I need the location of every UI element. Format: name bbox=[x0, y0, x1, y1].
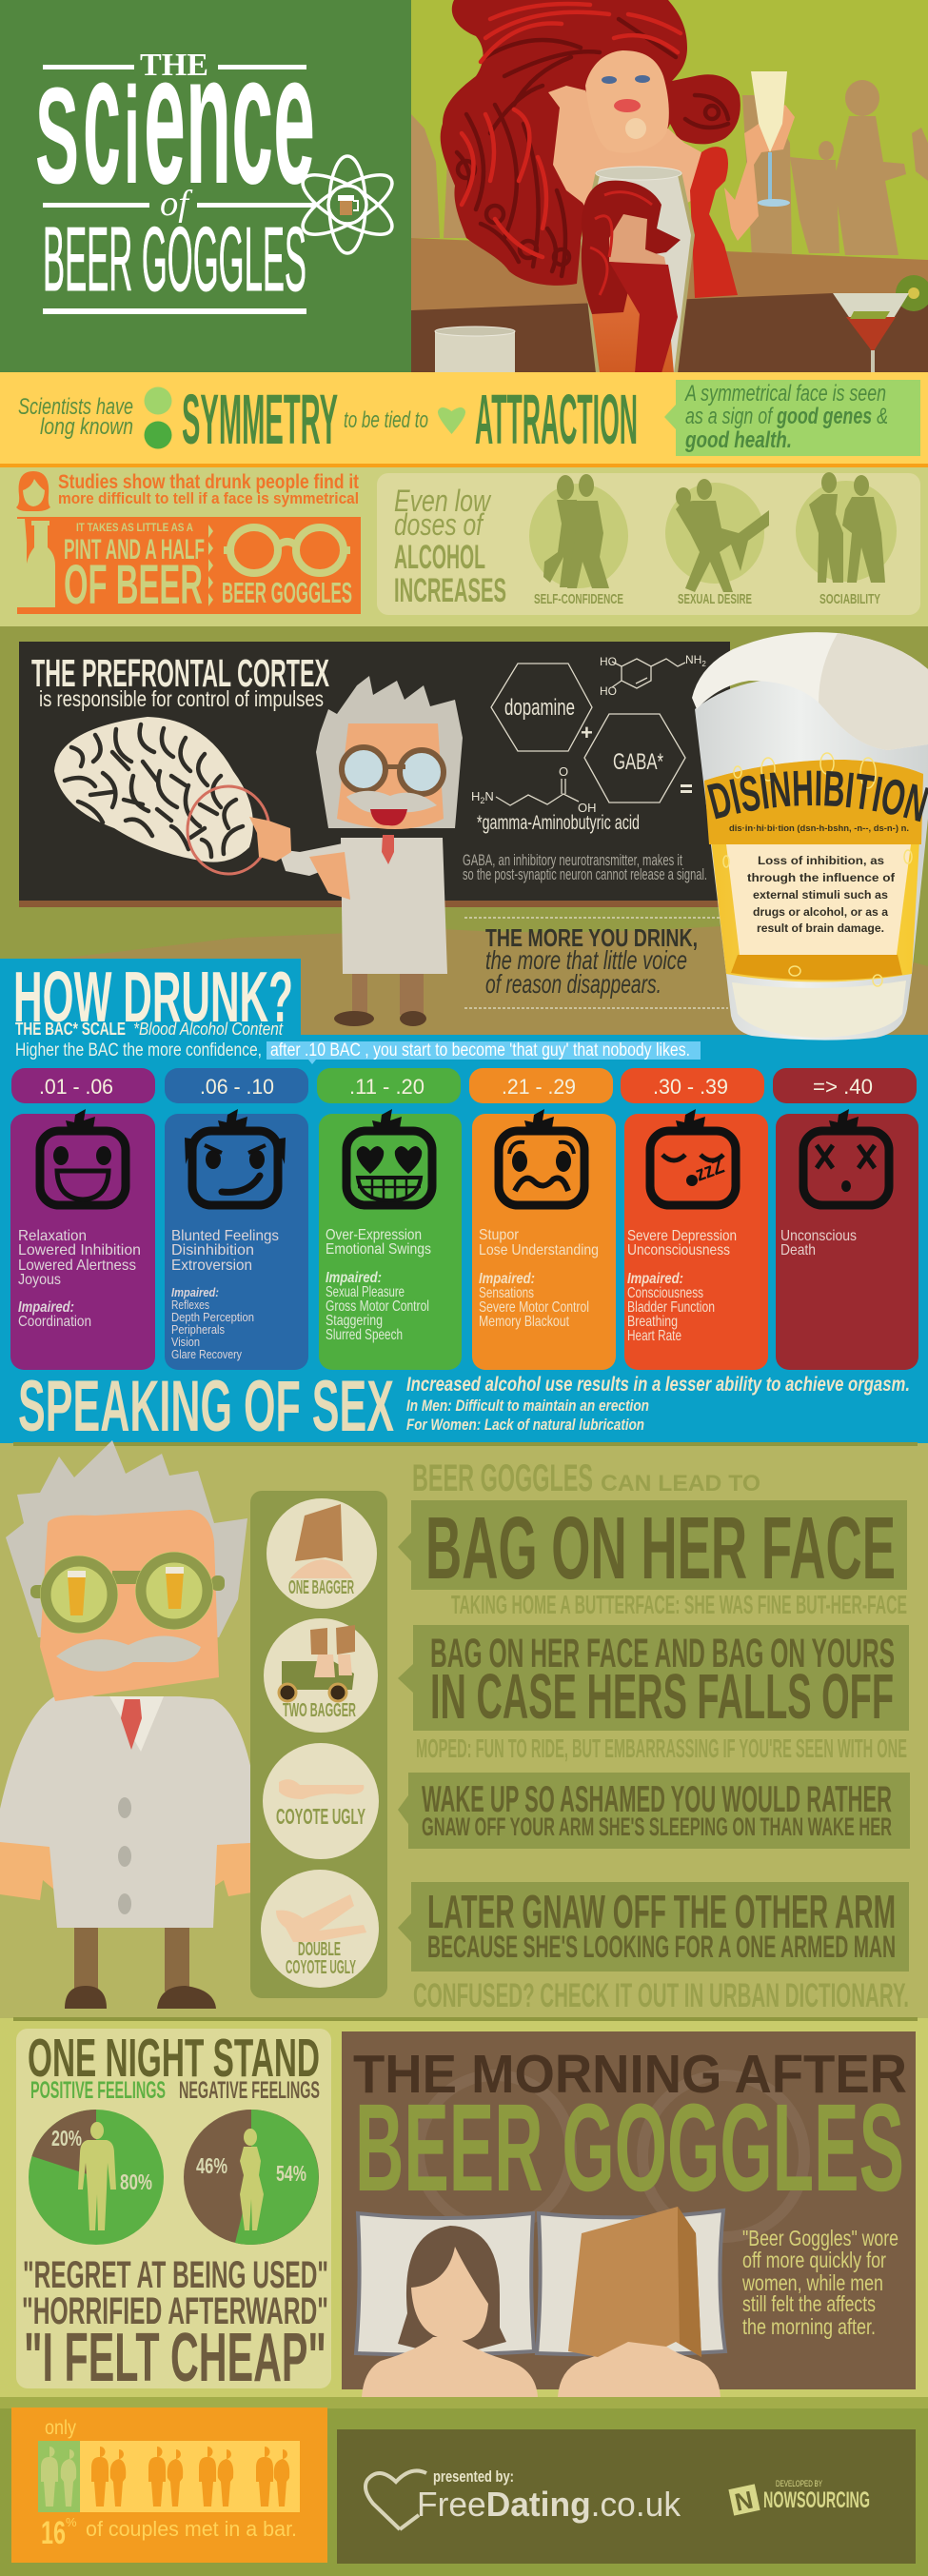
goggles with beer bbox=[30, 1552, 225, 1634]
icon: two bagger moped bbox=[264, 1618, 378, 1733]
quotes: "REGRET AT BEING USED" bbox=[23, 2254, 328, 2296]
text: responsible: is responsible for control of impulses bbox=[39, 686, 324, 711]
labels: chemistry: O bbox=[559, 764, 568, 779]
text: scientists have long known: Scientists have bbox=[18, 394, 133, 420]
labels: effects: SELF-CONFIDENCE bbox=[534, 591, 623, 607]
pillows bbox=[356, 2210, 725, 2355]
card: .01-.06 bbox=[10, 1109, 155, 1370]
labels: chemistry: GABA* bbox=[613, 749, 663, 775]
text: the more you drink: the more that little voice bbox=[485, 945, 687, 975]
icon: happy face bbox=[40, 1109, 126, 1205]
text: symptoms: Bladder Function bbox=[627, 1299, 715, 1316]
martini glass bbox=[833, 275, 928, 373]
text: symptoms bbox=[171, 1228, 279, 1361]
icon: one bagger bbox=[267, 1498, 377, 1609]
title text: of bbox=[160, 184, 193, 224]
icon: female head bbox=[16, 471, 50, 511]
text: symptoms: Heart Rate bbox=[627, 1328, 681, 1344]
text: studies show: more difficult to tell if a face is symmetrical bbox=[58, 489, 359, 507]
labels: chemistry: HO bbox=[600, 655, 617, 668]
head bbox=[40, 1510, 219, 1701]
labels: chemistry: dopamine bbox=[504, 695, 575, 721]
labels: chemistry: 2 bbox=[701, 660, 706, 668]
icon: dead face bbox=[803, 1109, 889, 1205]
BAC range pills: .01 - .06 bbox=[39, 1075, 113, 1099]
text: pronunciation: dis·in·hi·bi·tion (dsn-h-bshn, -n--, ds-n-) n. bbox=[729, 823, 909, 833]
text: symptoms: Stupor bbox=[479, 1227, 520, 1243]
quotes: "HORRIFIED AFTERWARD" bbox=[22, 2290, 328, 2332]
text: the more you drink: THE MORE YOU DRINK, bbox=[485, 923, 698, 952]
text: speaking of sex bbox=[406, 1374, 910, 1434]
text: definition: Loss of inhibition, as bbox=[758, 854, 884, 867]
text: definition bbox=[747, 854, 896, 935]
beer foam bbox=[692, 632, 928, 750]
callout: wake up ashamed bbox=[398, 1773, 910, 1849]
text: symptoms: Gross Motor Control bbox=[326, 1298, 429, 1315]
chalkboard bbox=[19, 642, 730, 907]
text: speaking of sex: For Women: Lack of natural lubrication bbox=[406, 1416, 644, 1434]
woman in bed bbox=[362, 2226, 538, 2397]
icon: sociability couple bbox=[796, 472, 897, 583]
mound bbox=[59, 923, 928, 1036]
professor: pointing bbox=[249, 676, 463, 1026]
text: symptoms: Impaired: bbox=[326, 1270, 382, 1286]
labels: chemistry: 2 bbox=[480, 796, 484, 805]
beer glass with beautiful woman bbox=[581, 167, 695, 373]
woman: face bbox=[585, 50, 669, 153]
text: symptoms: Staggering bbox=[326, 1313, 383, 1329]
labels: effects: SOCIABILITY bbox=[819, 591, 880, 607]
text: symptoms bbox=[627, 1228, 737, 1344]
text: the more you drink bbox=[485, 923, 698, 999]
text: symptoms: Memory Blackout bbox=[479, 1314, 569, 1330]
icon: symmetric dots bbox=[145, 386, 171, 449]
man with paper bag bbox=[558, 2207, 721, 2397]
pie chart: positive 80 percent: 80% bbox=[120, 2170, 152, 2194]
icon: sexual desire couple bbox=[665, 479, 769, 592]
heading: the prefrontal cortex: THE PREFRONTAL CORTEX bbox=[31, 651, 329, 695]
callout: bag on yours bbox=[398, 1625, 909, 1733]
logo: nowsourcing: DEVELOPED BY bbox=[776, 2479, 822, 2488]
BAC range pills: => .40 bbox=[813, 1075, 873, 1099]
panel: alcohol increases bbox=[377, 472, 920, 615]
text: symptoms: Lowered Alertness bbox=[18, 1258, 136, 1274]
icon: heart bbox=[438, 407, 465, 434]
panel: studies and doses bbox=[0, 467, 928, 626]
icon: atom with beer mug bbox=[295, 156, 400, 253]
icon: heart logo bbox=[365, 2470, 426, 2529]
text: symptoms bbox=[326, 1227, 431, 1343]
labels: chemistry bbox=[471, 653, 706, 834]
text: beer goggles wore off: women, while men bbox=[741, 2270, 883, 2295]
text: symptoms: Extroversion bbox=[171, 1258, 252, 1274]
head bbox=[337, 723, 444, 829]
legs bbox=[334, 971, 426, 1026]
panel: alcohol increases: INCREASES bbox=[394, 572, 506, 609]
text: symptoms: Consciousness bbox=[627, 1285, 703, 1301]
card: =>.40 bbox=[776, 1109, 918, 1370]
callout: other arm bbox=[398, 1882, 909, 1972]
BAC range pills: .30 - .39 bbox=[653, 1075, 728, 1099]
text: the more you drink: of reason disappears. bbox=[485, 969, 661, 999]
glasses bbox=[342, 747, 444, 794]
text: symptoms: Blunted Feelings bbox=[171, 1228, 279, 1244]
legs and shoes bbox=[65, 1923, 216, 2009]
woman: hair bbox=[441, 0, 740, 286]
icon: sleeping face: zzZ bbox=[692, 1154, 727, 1186]
panel: pint and a half: OF BEER bbox=[64, 554, 203, 616]
panel: one night stand bbox=[16, 2028, 331, 2396]
text: symptoms: Breathing bbox=[627, 1314, 678, 1330]
heading: beer goggles can lead to: CAN LEAD TO bbox=[601, 1471, 760, 1496]
diagram: dopamine and gaba hexagons bbox=[491, 659, 685, 805]
panel: prefrontal cortex bbox=[0, 626, 928, 1036]
illustration: bar scene bbox=[411, 0, 928, 373]
hands bbox=[0, 1836, 269, 1900]
text: definition: external stimuli such as bbox=[753, 888, 888, 902]
pie chart: negative 54 percent: 46% bbox=[196, 2153, 227, 2178]
panel: title: ence bbox=[144, 14, 315, 223]
icons: couples bbox=[41, 2447, 289, 2507]
icon: double coyote ugly arms: DOUBLE bbox=[298, 1939, 341, 1960]
champagne flute bbox=[751, 71, 790, 207]
lab coat bbox=[0, 1694, 265, 1928]
icon: heart eyes face bbox=[346, 1109, 432, 1205]
panel: footer bbox=[0, 2397, 928, 2576]
text: symptoms: Impaired: bbox=[479, 1271, 535, 1287]
icon: smirking face bbox=[185, 1109, 286, 1205]
beer glass: disinhibition bbox=[692, 632, 928, 1040]
BAC range pills: .06 - .10 bbox=[200, 1075, 274, 1099]
labels: chemistry: *gamma-Aminobutyric acid bbox=[477, 812, 640, 834]
text: symptoms: Depth Perception bbox=[171, 1310, 254, 1324]
card: .21-.29 bbox=[472, 1109, 616, 1370]
panel: symmetry: SYMMETRY bbox=[182, 380, 338, 459]
icon: brain bbox=[54, 717, 253, 862]
text: symptoms: Sexual Pleasure bbox=[326, 1284, 405, 1300]
panel: symmetry: ATTRACTION bbox=[475, 380, 638, 459]
panel: beer goggles can lead to bbox=[0, 1440, 928, 2018]
title text: THE bbox=[140, 48, 208, 83]
text: symptoms: Coordination bbox=[18, 1314, 91, 1330]
panel: alcohol increases: doses of bbox=[394, 507, 484, 542]
labels: chemistry: + bbox=[581, 721, 593, 744]
bar counter bbox=[411, 238, 928, 314]
panel: pint and a half: IT TAKES AS LITTLE AS A bbox=[76, 521, 193, 534]
moustache bbox=[56, 1635, 201, 1672]
heading: disinhibition bbox=[714, 805, 928, 824]
text: presented by: presented by: bbox=[433, 2467, 514, 2486]
coat bbox=[341, 838, 447, 974]
text: gaba description: so the post-synaptic neuron cannot release a signal. bbox=[463, 865, 707, 883]
text: beer goggles wore off: the morning after. bbox=[742, 2314, 876, 2339]
panel: title: BEER GOGGLES bbox=[43, 208, 306, 310]
labels: effects bbox=[534, 591, 880, 607]
heading: beer goggles can lead to: BEER GOGGLES bbox=[412, 1457, 593, 1499]
panel: symmetry bbox=[0, 372, 928, 467]
heading: how drunk: HOW DRUNK? bbox=[13, 957, 293, 1037]
logo: freedating: FreeDating.co.uk bbox=[417, 2485, 681, 2524]
panel: couples met in a bar bbox=[11, 2408, 327, 2563]
stat: 16 percent: % bbox=[66, 2515, 77, 2529]
background silhouettes bbox=[411, 80, 928, 257]
logo: nowsourcing: N bbox=[732, 2485, 756, 2517]
professor with beer goggles bbox=[0, 1440, 269, 2009]
moustache and mouth bbox=[346, 791, 437, 813]
icon: double coyote ugly arms bbox=[261, 1870, 379, 1988]
icon: coyote ugly arm bbox=[263, 1743, 379, 1859]
text: symptoms: Disinhibition bbox=[171, 1242, 254, 1258]
panel: alcohol increases: Even low bbox=[394, 484, 491, 518]
text: symptoms: Impaired: bbox=[18, 1299, 74, 1316]
card: .30-.39 bbox=[624, 1109, 768, 1370]
text: gaba description bbox=[463, 851, 707, 883]
rocks glass bbox=[435, 327, 515, 373]
text: bac scale bbox=[15, 1020, 284, 1039]
text: symptoms: Lose Understanding bbox=[479, 1242, 599, 1258]
tie bbox=[121, 1699, 142, 1750]
BAC range pills: .11 - .20 bbox=[349, 1075, 425, 1099]
text: symptoms: Unconsciousness bbox=[627, 1242, 730, 1258]
panel: credits bbox=[337, 2429, 916, 2564]
text: beer goggles wore off: still felt the affects bbox=[742, 2291, 876, 2316]
pie chart: negative 54 percent: 54% bbox=[276, 2161, 306, 2186]
text: beer goggles wore off: off more quickly for bbox=[742, 2248, 886, 2272]
text: symptoms: Severe Motor Control bbox=[479, 1299, 589, 1316]
title text: S bbox=[35, 59, 79, 212]
icon: one bagger: ONE BAGGER bbox=[288, 1577, 354, 1598]
pie chart: negative 54 percent bbox=[184, 2110, 319, 2245]
woman: red dress bbox=[690, 147, 738, 298]
text: symptoms: Joyous bbox=[18, 1272, 61, 1288]
text: beer goggles wore off bbox=[741, 2226, 898, 2339]
panel: couples met in a bar: only bbox=[45, 2417, 76, 2439]
text: symptoms: Vision bbox=[171, 1335, 200, 1349]
text: symptoms: Impaired: bbox=[171, 1285, 219, 1299]
text: symptoms: Reflexes bbox=[171, 1298, 209, 1312]
icon: confused face bbox=[499, 1109, 584, 1205]
text: studies show: Studies show that drunk people find it bbox=[58, 471, 359, 493]
panel: pint and a half: BEER GOGGLES bbox=[222, 576, 352, 609]
hair bbox=[316, 676, 463, 828]
text: symptoms: Impaired: bbox=[627, 1271, 683, 1287]
panel: one night stand section bbox=[0, 2017, 928, 2397]
text: studies show bbox=[58, 471, 359, 507]
panel: alcohol increases: ALCOHOL bbox=[394, 539, 485, 576]
icon: double coyote ugly arms: COYOTE UGLY bbox=[286, 1957, 356, 1978]
stat: 16 percent: 16 bbox=[41, 2515, 66, 2551]
callout: good genes: as a sign of good genes & bbox=[685, 404, 888, 429]
text: symptoms bbox=[18, 1228, 141, 1330]
panel: pint and a half bbox=[17, 517, 361, 616]
panel: the morning after: THE MORNING AFTER bbox=[353, 2044, 907, 2105]
side panel bbox=[250, 1491, 387, 1998]
icon: self-confidence couple bbox=[529, 474, 628, 588]
text: scientists have long known: long known bbox=[40, 414, 133, 440]
bubbles bbox=[723, 753, 912, 986]
pie chart: positive 80 percent: 20% bbox=[51, 2126, 82, 2150]
logo: nowsourcing bbox=[728, 2479, 870, 2518]
title text: i bbox=[124, 59, 140, 212]
text: symptoms bbox=[780, 1228, 857, 1258]
title text: c bbox=[83, 14, 121, 223]
text: symptoms: Over-Expression bbox=[326, 1227, 422, 1243]
icon: sleeping face bbox=[650, 1109, 736, 1205]
BAC range pills bbox=[11, 1068, 917, 1103]
text: symptoms: Peripherals bbox=[171, 1322, 225, 1337]
card: .11-.20 bbox=[319, 1109, 462, 1370]
text: speaking of sex: In Men: Difficult to maintain an erection bbox=[406, 1397, 649, 1415]
panel: the morning after bbox=[342, 2031, 916, 2397]
text: bac scale: *Blood Alcohol Content bbox=[133, 1020, 284, 1039]
text: definition: drugs or alcohol, or as a bbox=[753, 905, 888, 919]
hair strands bbox=[457, 4, 728, 276]
pie chart: positive 80 percent bbox=[29, 2110, 164, 2245]
text: gaba description: GABA, an inhibitory neurotransmitter, makes it bbox=[463, 851, 682, 869]
stat: 16 percent: of couples met in a bar. bbox=[86, 2517, 297, 2541]
icon: bottle bbox=[17, 519, 55, 607]
labels: chemistry: NH bbox=[685, 653, 701, 666]
quotes: "I FELT CHEAP" bbox=[24, 2320, 326, 2396]
panel: title bbox=[0, 0, 411, 373]
text: symptoms: Lowered Inhibition bbox=[18, 1242, 141, 1258]
heading: speaking of sex: SPEAKING OF SEX bbox=[18, 1366, 394, 1447]
icon: goggles bbox=[224, 527, 350, 573]
text: higher the bac: Higher the BAC the more confidence, bbox=[15, 1040, 262, 1060]
labels: effects: SEXUAL DESIRE bbox=[678, 591, 752, 607]
labels: chemistry: HO bbox=[600, 684, 617, 698]
text: symptoms: Unconscious bbox=[780, 1228, 857, 1244]
text: symptoms: Sensations bbox=[479, 1285, 534, 1301]
quotes bbox=[22, 2254, 328, 2396]
woman: body bbox=[548, 86, 709, 248]
text: definition: through the influence of bbox=[747, 871, 896, 884]
text: symptoms: Severe Depression bbox=[627, 1228, 737, 1244]
panel: pint and a half: PINT AND A HALF bbox=[64, 534, 205, 565]
labels: chemistry: OH bbox=[578, 801, 596, 815]
text: symptoms: Relaxation bbox=[18, 1228, 87, 1244]
icon: two bagger moped: TWO BAGGER bbox=[283, 1700, 356, 1721]
text: symptoms: Death bbox=[780, 1242, 816, 1258]
BAC range pills: .21 - .29 bbox=[502, 1075, 576, 1099]
callout: good genes: good health. bbox=[684, 427, 792, 453]
text: scientists have long known bbox=[18, 394, 133, 440]
text: symptoms bbox=[479, 1227, 599, 1330]
labels: chemistry: N bbox=[484, 789, 494, 803]
icon: coyote ugly arm: COYOTE UGLY bbox=[276, 1804, 365, 1829]
panel: one night stand: POSITIVE FEELINGS bbox=[30, 2077, 166, 2104]
stat: 16 percent bbox=[41, 2515, 297, 2551]
text: symptoms: Slurred Speech bbox=[326, 1327, 403, 1343]
title text bbox=[35, 14, 315, 314]
hair bbox=[6, 1440, 247, 1637]
hand bbox=[249, 817, 291, 862]
text: to be tied to: to be tied to bbox=[344, 407, 428, 433]
text: bac scale: THE BAC* SCALE bbox=[15, 1020, 126, 1039]
panel: one night stand: ONE NIGHT STAND bbox=[28, 2028, 320, 2089]
text: symptoms: Glare Recovery bbox=[171, 1347, 242, 1361]
labels: chemistry: H bbox=[471, 789, 480, 803]
panel: one night stand: NEGATIVE FEELINGS bbox=[179, 2077, 320, 2104]
text: symptoms: Emotional Swings bbox=[326, 1241, 431, 1258]
highlight circle on brain bbox=[188, 786, 269, 874]
text: definition: result of brain damage. bbox=[757, 921, 884, 935]
callout: good genes bbox=[664, 380, 920, 456]
card: .06-.10 bbox=[165, 1109, 308, 1370]
panel: how drunk bbox=[0, 632, 928, 1447]
callout: that guy: after .10 BAC , you start to become 'that guy' that nobody likes. bbox=[270, 1040, 690, 1060]
